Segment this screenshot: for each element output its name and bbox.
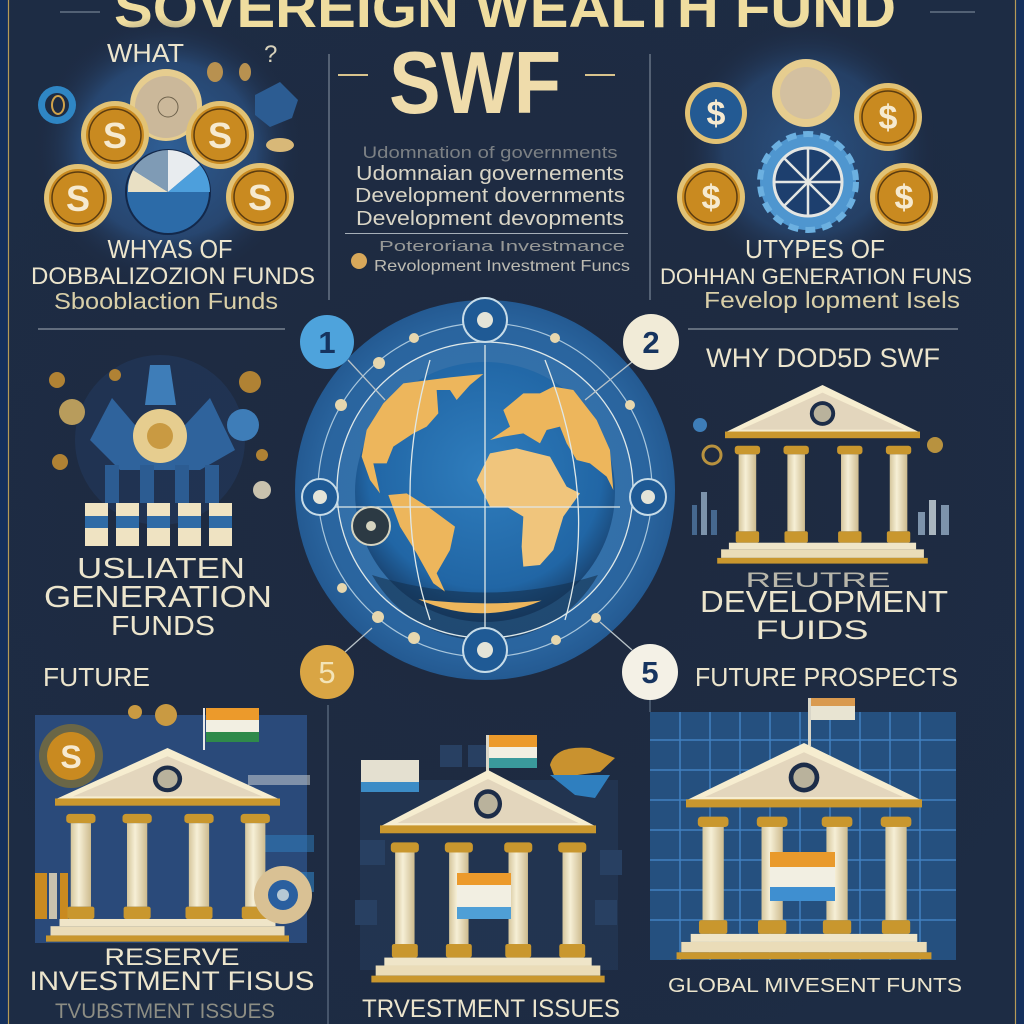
flag <box>203 708 259 750</box>
text block: INVESTMENT FISUS <box>30 966 314 996</box>
icon: blue blob <box>255 82 298 127</box>
flag top <box>808 698 855 746</box>
text block: Fevelop lopment Isels <box>704 287 960 313</box>
panel: why SWF <box>692 343 949 645</box>
illustration: machinery <box>49 355 271 525</box>
node markers <box>302 298 666 672</box>
text block: UTYPES OF <box>745 234 885 264</box>
heading: WHY DOD5D SWF <box>706 343 940 373</box>
text block: REUTRE <box>746 569 890 592</box>
text block: FUIDS <box>756 615 868 645</box>
icon: gold coin <box>39 724 103 788</box>
intro text block: Poteroriana Investmance <box>379 238 625 255</box>
text block <box>30 944 314 1023</box>
icon: blue badge <box>38 86 76 124</box>
intro text block: Udomnation of governments <box>362 143 618 162</box>
text block: USLIATEN <box>77 553 245 585</box>
panel: reserve investment funds <box>30 704 314 1023</box>
icon: pie chart <box>126 150 210 234</box>
text block <box>700 569 948 645</box>
text block <box>31 234 315 314</box>
icon: coins: $ <box>895 179 914 217</box>
glass sphere <box>337 342 633 638</box>
number badge 5 gold <box>300 645 354 699</box>
icon: coins: $ <box>707 95 726 133</box>
bar charts <box>692 418 949 535</box>
icon: gold coin: S <box>60 739 82 775</box>
panel: intergeneration funds <box>44 355 272 641</box>
icon: coins: $ <box>702 179 721 217</box>
subtitle SWF: SWF <box>389 33 561 132</box>
icon: temple <box>717 385 928 564</box>
icon: temple <box>677 743 931 959</box>
intro text block: Development dovernments <box>355 185 625 207</box>
text block: DEVELOPMENT <box>700 584 948 619</box>
bars <box>35 873 68 919</box>
text block: DOHHAN GENERATION FUNS <box>660 264 972 289</box>
number badge 2: 2 <box>642 325 660 360</box>
panel: global investment funds <box>650 698 962 997</box>
text block: Sbooblaction Funds <box>54 288 278 314</box>
icon: gold and blue emblem <box>550 748 615 798</box>
bars <box>85 503 232 546</box>
number badge 5 white: 5 <box>641 655 659 690</box>
number badge 2 <box>623 314 679 370</box>
icon: coins: $ <box>879 99 898 137</box>
flag in temple <box>457 873 511 919</box>
text block <box>44 553 272 641</box>
small gold ornaments <box>207 62 294 152</box>
heading: future: FUTURE <box>43 662 150 692</box>
intro text block: Revolopment Investment Funcs <box>374 258 630 275</box>
grid lines <box>335 342 633 638</box>
grid squares <box>355 745 622 970</box>
heading: future prospects: FUTURE PROSPECTS <box>695 662 958 692</box>
blue grid <box>650 712 956 960</box>
text block: WHYAS OF <box>108 234 232 264</box>
icon: temple <box>46 748 289 942</box>
intro text block <box>338 74 630 275</box>
icon: coins: S <box>248 177 272 218</box>
flag left <box>361 760 419 792</box>
caption: TRVESTMENT ISSUES <box>362 995 620 1023</box>
outer ring <box>318 323 652 657</box>
flag top <box>486 735 537 780</box>
number badge 1 <box>300 315 354 369</box>
text block: TVUBSTMENT ISSUES <box>55 1000 275 1023</box>
icon: coins <box>677 59 938 231</box>
panel: types of SWFs <box>660 20 972 313</box>
number badge 5 gold: 5 <box>318 655 336 690</box>
text block: FUNDS <box>111 610 215 641</box>
connector lines <box>345 360 632 652</box>
text block: GENERATION <box>44 579 272 614</box>
icon: coins <box>44 101 294 232</box>
outer disc <box>295 300 675 680</box>
icon: coins: S <box>66 178 90 219</box>
heading: WHAT <box>107 38 184 68</box>
number badge 5 white <box>622 644 678 700</box>
intro text block: Udomnaian governements <box>356 163 624 185</box>
info tags <box>248 775 314 892</box>
text block: DOBBALIZOZION FUNDS <box>31 263 315 290</box>
question mark: ? <box>264 41 277 68</box>
small coins <box>128 704 177 726</box>
icon: seal coin <box>130 69 202 141</box>
caption: GLOBAL MIVESENT FUNTS <box>668 975 962 997</box>
panel: investment issues <box>355 735 622 1023</box>
text block <box>660 234 972 313</box>
globe with continents <box>355 362 615 641</box>
icon: seal <box>254 866 312 924</box>
flag in temple <box>770 852 835 901</box>
panel: what are SWFs <box>31 15 315 314</box>
intro text block: Development devopments <box>356 208 624 230</box>
text block: RESERVE <box>104 944 240 971</box>
icon: gear <box>760 134 856 230</box>
central globe <box>295 298 675 680</box>
icon: coins: S <box>103 115 127 156</box>
icon: coins: S <box>208 115 232 156</box>
icon: temple <box>371 770 605 982</box>
blue background <box>35 715 307 943</box>
number badge 1: 1 <box>318 325 336 360</box>
